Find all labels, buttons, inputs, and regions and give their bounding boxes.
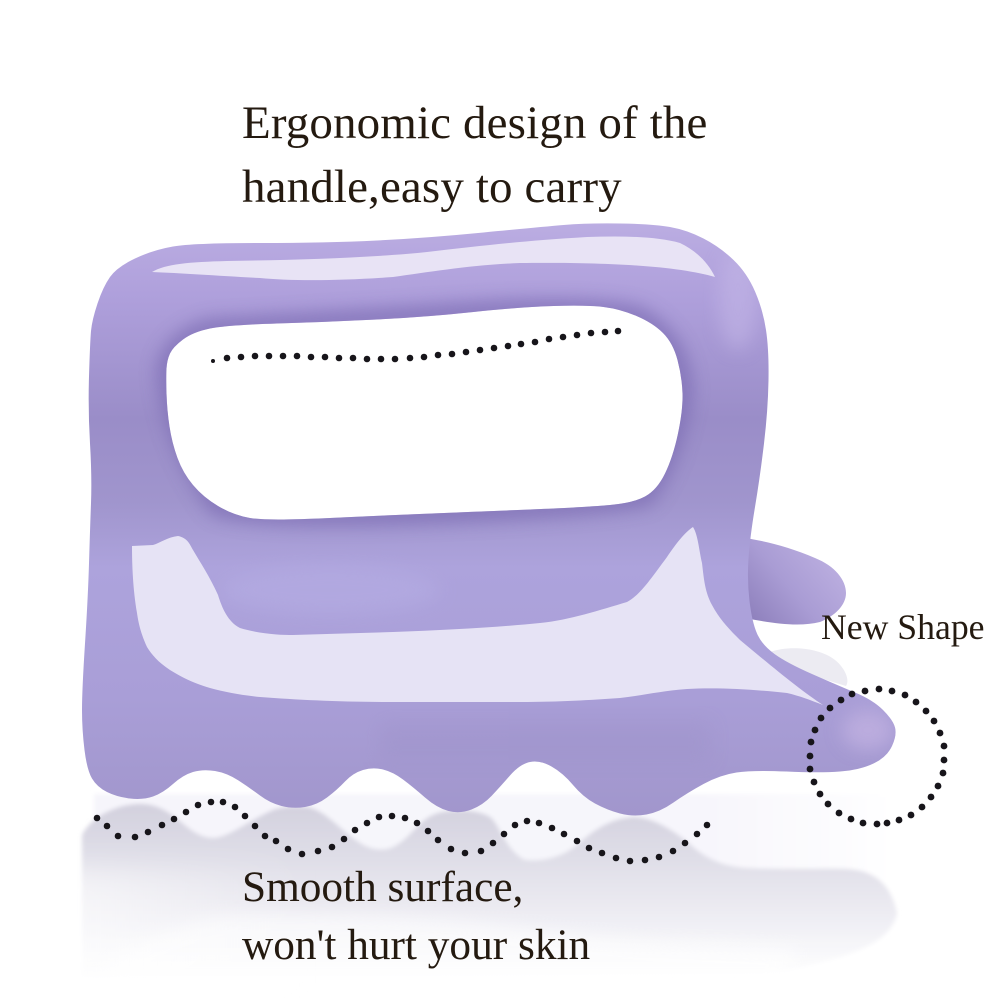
heading: handle design: Ergonomic design of the [242, 97, 708, 149]
body shading [166, 250, 894, 762]
main body with handle opening [82, 223, 896, 816]
top highlight [152, 237, 715, 280]
heading: handle design: handle,easy to carry [242, 161, 622, 213]
dotted line: handle [211, 328, 621, 363]
caption: smooth surface: won't hurt your skin [242, 921, 590, 969]
floor reflection [50, 648, 897, 985]
side prong [745, 538, 846, 625]
infographic canvas [80, 105, 984, 968]
caption: smooth surface: Smooth surface, [242, 863, 523, 911]
lower highlight [132, 527, 823, 705]
label: new shape: New Shape [821, 607, 985, 647]
dotted line: wavy surface [94, 799, 710, 864]
massage tool [82, 223, 896, 816]
dotted circle: new shape [807, 686, 947, 827]
